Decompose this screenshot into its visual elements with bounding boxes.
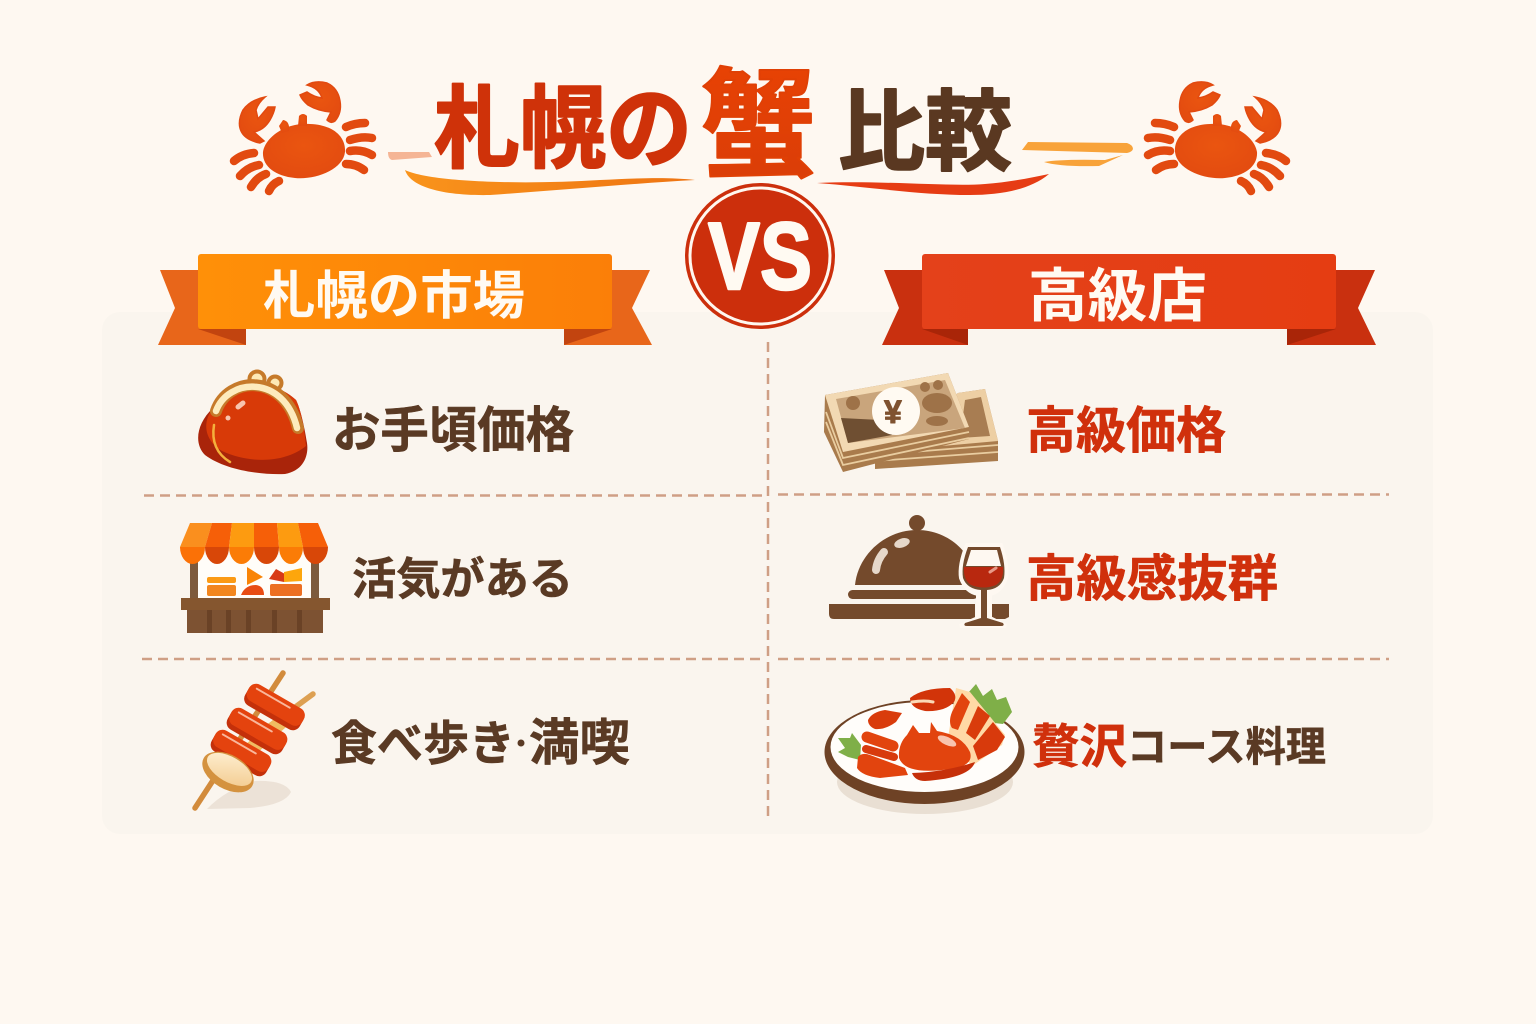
icon: yen banknotes <box>824 373 998 472</box>
text: 贅沢コース料理: 贅沢 <box>1032 720 1127 773</box>
icon: coin purse <box>198 372 307 474</box>
text: 食べ歩き・満喫: 食べ歩き <box>331 717 515 770</box>
VS badge: VS <box>708 203 812 310</box>
comparison panel <box>102 312 1433 834</box>
text: 活気がある: 活気がある <box>352 555 573 604</box>
icon: skewer <box>195 673 313 809</box>
text: 高級価格: 高級価格 <box>1026 403 1226 459</box>
dividers <box>142 342 1389 822</box>
title decoration: left swoosh <box>388 152 695 195</box>
text: お手頃価格: お手頃価格 <box>332 404 574 458</box>
title text: 札幌の <box>434 80 692 180</box>
text: 食べ歩き・満喫: 満喫 <box>529 715 630 771</box>
icon: cloche and wine glass <box>829 515 1009 626</box>
ribbon: 札幌の市場: 札幌の市場 <box>263 268 525 326</box>
icon: left crab <box>234 82 372 191</box>
text: 高級感抜群: 高級感抜群 <box>1026 551 1278 607</box>
title text: 蟹 <box>701 61 816 193</box>
icon: yen banknotes: ¥ <box>884 394 902 430</box>
text: 贅沢コース料理 <box>1032 720 1326 773</box>
ribbon: 札幌の市場 <box>158 254 652 345</box>
title decoration: right swoosh <box>817 142 1133 195</box>
text: 食べ歩き・満喫 <box>331 715 630 771</box>
title text <box>434 61 1012 193</box>
ribbon: 高級店: 高級店 <box>1028 264 1207 329</box>
ribbon: 高級店 <box>882 254 1376 345</box>
icon: right crab <box>1148 82 1286 191</box>
text: 贅沢コース料理: コース料理 <box>1127 724 1326 770</box>
VS badge <box>685 183 835 329</box>
title text: 比較 <box>838 83 1012 182</box>
icon: crab plate <box>824 684 1024 814</box>
icon: market stall <box>180 523 330 633</box>
